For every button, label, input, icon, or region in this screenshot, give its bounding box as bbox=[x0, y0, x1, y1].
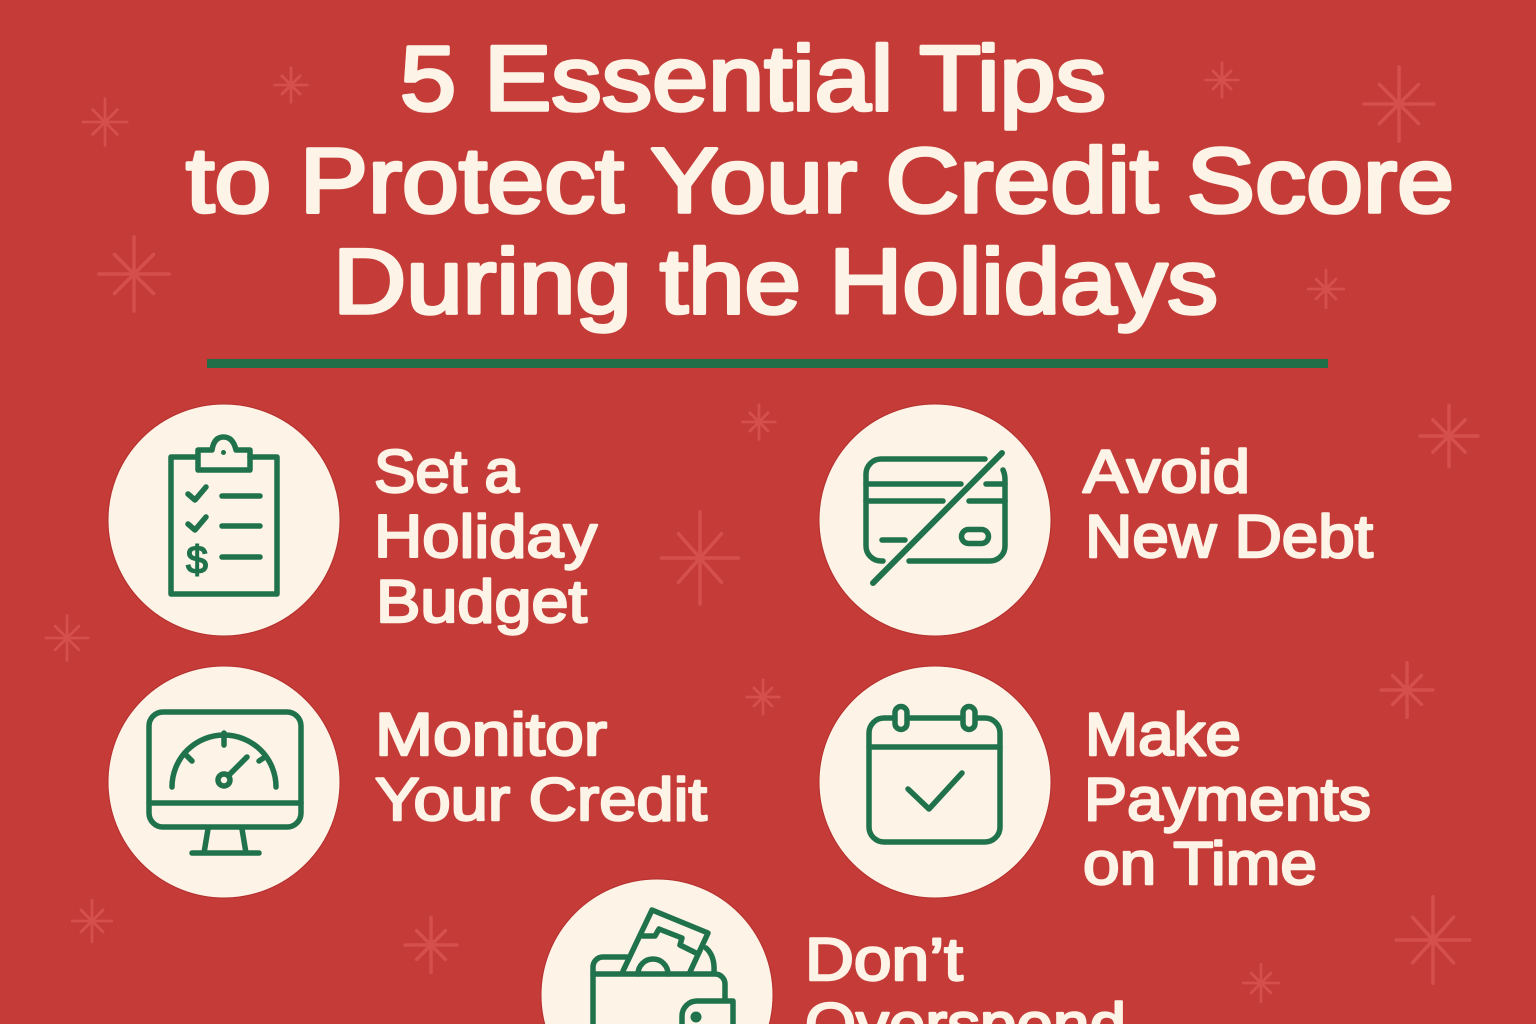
divider rule bbox=[207, 359, 1328, 368]
label: make payments on time bbox=[1083, 700, 1371, 897]
icon: wallet with cash bbox=[541, 879, 773, 1024]
title: 5 Essential Tips bbox=[400, 28, 1106, 130]
tip 1: set a holiday budget bbox=[108, 404, 598, 636]
label: set a holiday budget: Set a bbox=[374, 437, 519, 505]
label: monitor your credit: Your Credit bbox=[375, 765, 707, 833]
label: set a holiday budget: Holiday bbox=[374, 502, 598, 570]
icon: clipboard bbox=[108, 404, 340, 636]
label: avoid new debt bbox=[1083, 437, 1373, 570]
label: set a holiday budget: Budget bbox=[376, 567, 587, 635]
title: During the Holidays bbox=[333, 231, 1218, 333]
tip 4: make payments on time bbox=[819, 666, 1371, 898]
icon: calendar with check bbox=[819, 666, 1051, 898]
label: monitor your credit: Monitor bbox=[375, 700, 607, 768]
label: make payments on time: on Time bbox=[1083, 829, 1317, 897]
icon: clipboard: $ bbox=[186, 539, 208, 582]
label: don't overspend: Don’t bbox=[805, 925, 963, 993]
tip 3: monitor your credit bbox=[108, 666, 707, 898]
label: avoid new debt: Avoid bbox=[1083, 437, 1250, 505]
icon: crossed-out credit card bbox=[819, 404, 1051, 636]
title: to Protect Your Credit Score bbox=[186, 130, 1454, 232]
tip 5: don't overspend bbox=[541, 879, 1126, 1024]
label: make payments on time: Payments bbox=[1084, 765, 1371, 833]
title bbox=[186, 28, 1454, 333]
label: set a holiday budget bbox=[374, 437, 598, 635]
label: don't overspend bbox=[805, 925, 1126, 1024]
label: make payments on time: Make bbox=[1085, 700, 1241, 768]
icon: monitor with gauge bbox=[108, 666, 340, 898]
label: avoid new debt: New Debt bbox=[1085, 502, 1373, 570]
tip 2: avoid new debt bbox=[819, 404, 1373, 636]
label: monitor your credit bbox=[375, 700, 707, 833]
